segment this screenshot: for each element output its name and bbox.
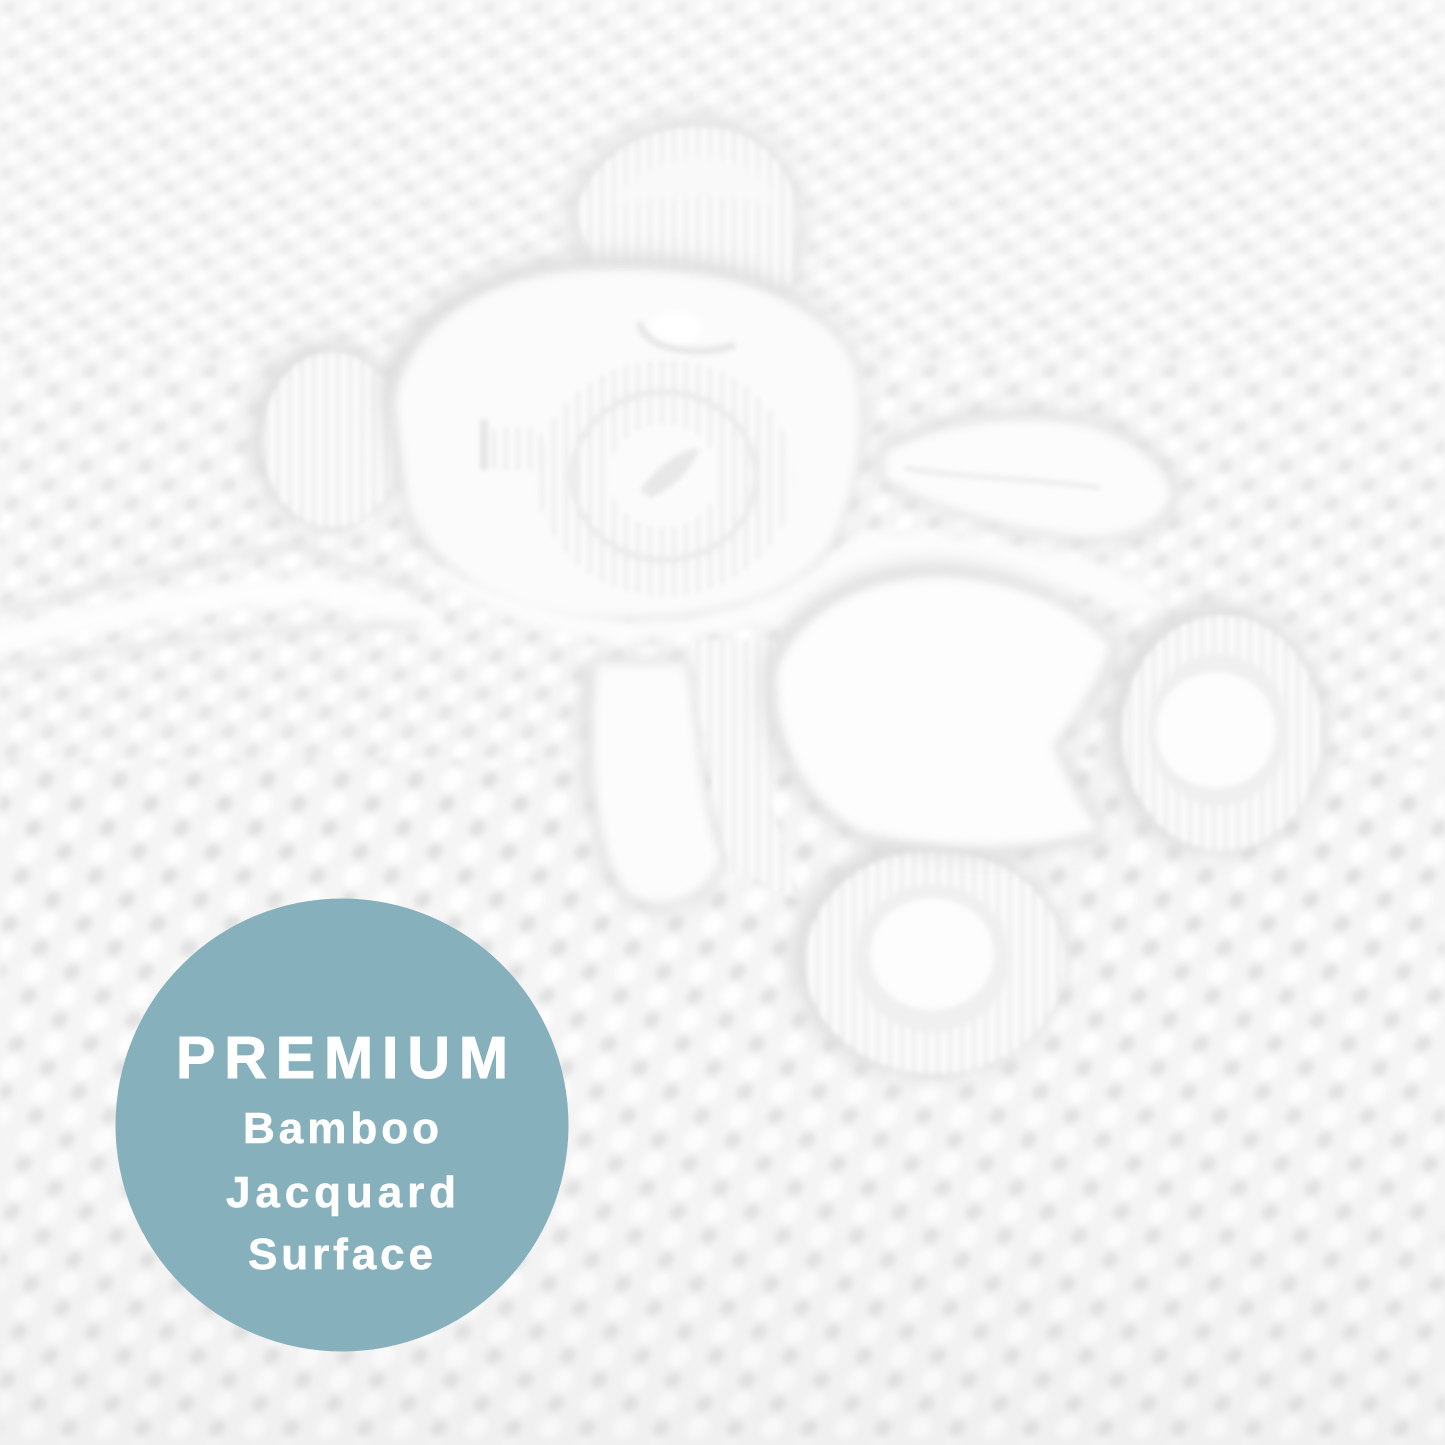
embossed bear motif bbox=[0, 115, 1326, 1078]
badge circle bbox=[116, 898, 568, 1352]
bear: leg ribs bbox=[690, 640, 800, 900]
badge text: Jacquard: Jacquard bbox=[226, 1168, 456, 1217]
bear: belly bbox=[763, 563, 1120, 854]
bear: head bbox=[380, 254, 864, 621]
bear: collar ribbon bbox=[410, 533, 1170, 640]
bear: right foot bbox=[1106, 603, 1326, 855]
badge heading: PREMIUM bbox=[176, 1025, 508, 1091]
bear: eye top bbox=[640, 312, 735, 351]
bear: left limb bbox=[581, 660, 728, 911]
badge text: Surface: Surface bbox=[248, 1230, 433, 1279]
bear: top ear bbox=[562, 115, 805, 320]
bear: left wavy ribbon bbox=[0, 545, 430, 668]
bear: right arm bbox=[876, 410, 1180, 543]
bear: muzzle rings bbox=[537, 360, 793, 596]
badge text: Bamboo: Bamboo bbox=[243, 1104, 439, 1153]
bear: left ear bbox=[250, 342, 402, 530]
bear: bottom foot bbox=[791, 838, 1067, 1078]
bear: eye left bbox=[484, 420, 546, 470]
badge: premium bamboo jacquard surface bbox=[116, 898, 568, 1352]
